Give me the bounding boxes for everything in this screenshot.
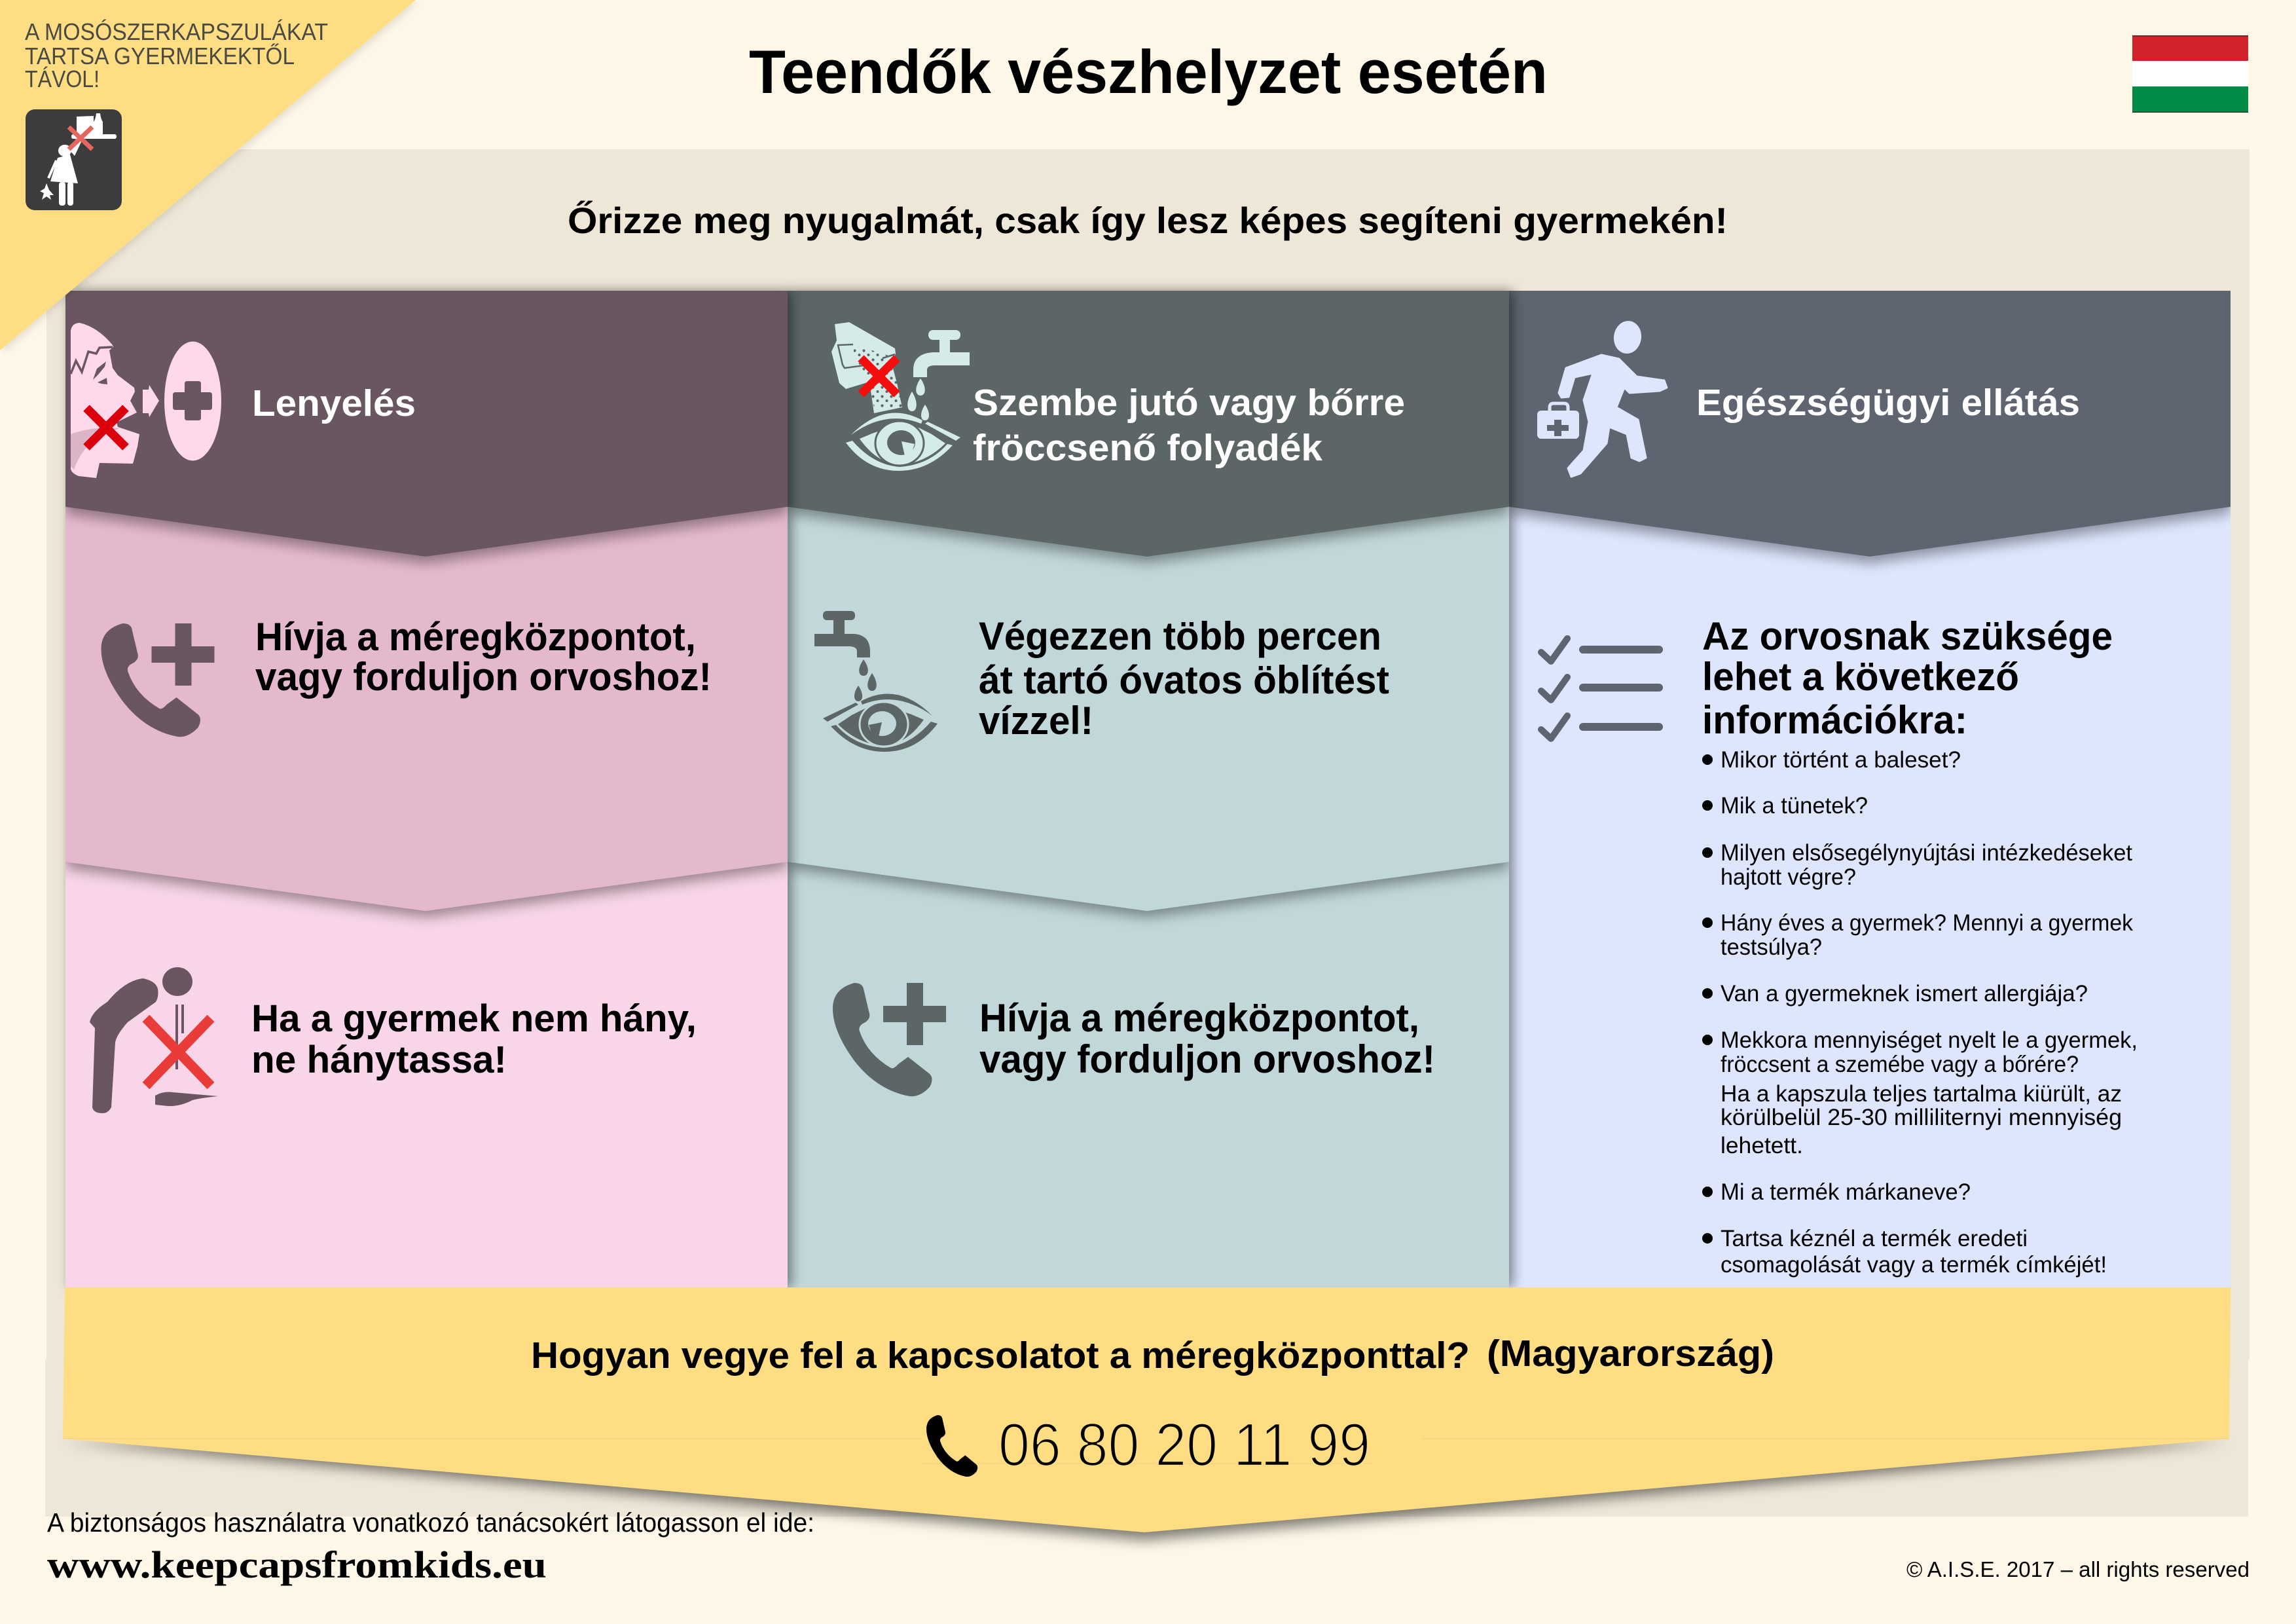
text block: call poison centre: Hívja a méregközpontot, [979, 996, 1419, 1040]
text block: information list: lehetett. [1721, 1133, 1803, 1158]
label: country: (Magyarország) [1487, 1333, 1774, 1375]
heading: doctor information [1702, 614, 2113, 742]
text block: rinse with water: vízzel! [979, 699, 1093, 743]
heading: how to contact: Hogyan vegye fel a kapcsolatot a méregközponttal? [531, 1335, 1470, 1376]
corner banner: keep capsules away [0, 0, 416, 350]
text block: information list: Hány éves a gyermek? Mennyi a gyermek [1721, 910, 2133, 936]
text block: call poison centre [255, 615, 712, 699]
text block: call poison centre: vagy forduljon orvoshoz! [979, 1037, 1435, 1081]
text block: information list: fröccsent a szemébe vagy a bőrére? [1721, 1052, 2079, 1077]
text block: information list: körülbelül 25-30 milliliternyi mennyiség [1721, 1105, 2122, 1130]
flag: Hungary [2132, 35, 2248, 113]
panel: poison centre contact [63, 1287, 2231, 1540]
subtitle: stay calm: Őrizze meg nyugalmát, csak így lesz képes segíteni gyermekén! [568, 200, 1728, 241]
heading: Szembe jutó vagy bőrre fröccsenő folyadék: fröccsenő folyadék [973, 427, 1322, 469]
heading: doctor information: Az orvosnak szüksége [1702, 614, 2113, 658]
heading: doctor information: lehet a következő [1702, 655, 2019, 699]
warning text [25, 18, 328, 92]
panel: healthcare column [1509, 291, 2231, 1287]
panel: eye and skin contact column [788, 291, 1509, 1287]
text block: information list: hajtott végre? [1721, 864, 1856, 890]
title: Teendők vészhelyzet esetén [749, 37, 1548, 106]
heading: Egészségügyi ellátás: Egészségügyi ellátás [1696, 382, 2080, 424]
icon: doctor running with first aid kit [1537, 319, 1667, 477]
warning text: A MOSÓSZERKAPSZULÁKAT [25, 18, 328, 45]
heading: Szembe jutó vagy bőrre fröccsenő folyadék [973, 382, 1405, 469]
icon: child reaching for shelf [26, 109, 122, 210]
text block: rinse with water [979, 614, 1389, 743]
text block: information list: Mekkora mennyiséget nyelt le a gyermek, [1721, 1027, 2138, 1053]
panel: ingestion column [65, 291, 788, 1287]
icon: capsule splash, tap and eye [831, 322, 970, 471]
text block: call poison centre: Hívja a méregközpontot, [255, 615, 696, 659]
text block: information list [1702, 747, 2138, 1278]
text block: information list: Van a gyermeknek ismert allergiája? [1721, 981, 2088, 1006]
icon: checklist [1541, 638, 1663, 739]
text block: call poison centre [979, 996, 1435, 1081]
text block: do not induce vomiting: ne hánytassa! [251, 1039, 507, 1081]
icon: tap dripping on eye [814, 611, 938, 752]
text block: information list: Ha a kapszula teljes tartalma kiürült, az [1721, 1081, 2122, 1107]
text block: do not induce vomiting: Ha a gyermek nem hány, [251, 997, 697, 1040]
text block: rinse with water: Végezzen több percen [979, 614, 1381, 658]
phone number: 06 80 20 11 99 [998, 1411, 1370, 1479]
heading: doctor information: információkra: [1702, 698, 1967, 742]
text block: information list: Milyen elsősegélynyújtási intézkedéseket [1721, 840, 2132, 866]
heading: Szembe jutó vagy bőrre fröccsenő folyadék: Szembe jutó vagy bőrre [973, 382, 1405, 424]
text block: information list: Tartsa kéznél a termék eredeti [1721, 1226, 2028, 1251]
text block: information list: Mi a termék márkaneve? [1721, 1179, 1971, 1205]
icon: face with crossed mouth and medical sign [71, 323, 221, 478]
warning text: TARTSA GYERMEKEKTŐL [25, 43, 295, 69]
text block: information list: Mikor történt a baleset? [1721, 747, 1961, 773]
icon: phone with plus [833, 983, 946, 1096]
icon: phone with plus [101, 623, 215, 737]
footer: safe use advice: A biztonságos használatra vonatkozó tanácsokért látogasson el ide: [47, 1507, 814, 1538]
icon: telephone [926, 1415, 977, 1477]
icon: vomiting figure crossed out [90, 967, 218, 1113]
footer: copyright: © A.I.S.E. 2017 – all rights reserved [1906, 1557, 2250, 1581]
warning text: TÁVOL! [25, 65, 100, 92]
text block: information list: csomagolását vagy a termék címkéjét! [1721, 1252, 2107, 1278]
text block: information list: testsúlya? [1721, 934, 1822, 960]
footer: website: www.keepcapsfromkids.eu [47, 1543, 547, 1586]
text block: do not induce vomiting [251, 997, 697, 1081]
text block: call poison centre: vagy forduljon orvoshoz! [255, 655, 712, 699]
text block: rinse with water: át tartó óvatos öblítést [979, 658, 1389, 702]
heading: Lenyelés: Lenyelés [252, 382, 416, 424]
text block: information list: Mik a tünetek? [1721, 793, 1868, 819]
